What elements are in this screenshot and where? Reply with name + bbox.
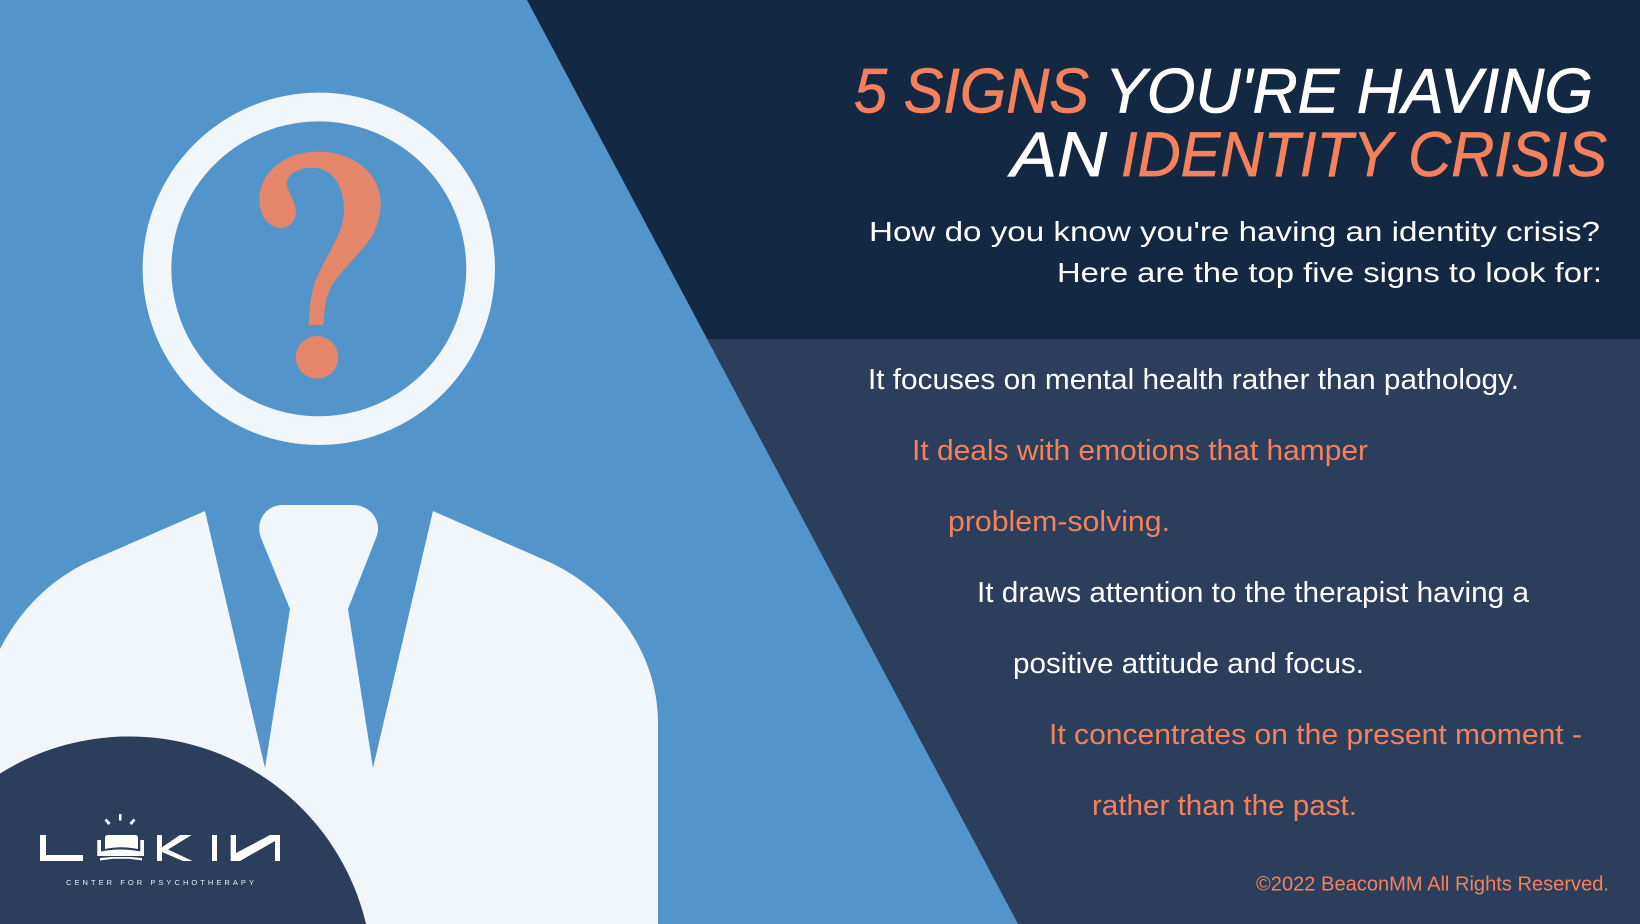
logo letter N mirrored — [231, 835, 280, 861]
icon: question mark — [259, 152, 381, 379]
icon: faceless person figure — [0, 107, 658, 924]
sign 3 — [977, 577, 1530, 680]
intro text — [869, 216, 1602, 288]
sign 4: rather than the past. — [1092, 790, 1357, 822]
suit and tie body — [0, 505, 658, 924]
panel: logo corner circle — [0, 736, 366, 924]
logo: Lokin Center for Psychotherapy — [40, 814, 280, 887]
logo letter L — [40, 835, 83, 861]
sign 4: It concentrates on the present moment - — [1049, 719, 1582, 751]
sign 3: It draws attention to the therapist having a — [977, 577, 1530, 609]
copyright notice: ©2022 BeaconMM All Rights Reserved. — [1256, 873, 1609, 896]
title line 1 — [854, 57, 1593, 127]
sign 3: positive attitude and focus. — [1013, 648, 1364, 680]
logo letter K — [157, 835, 192, 861]
sign 4 — [1049, 719, 1582, 822]
head ring — [157, 107, 481, 431]
panel: lighter navy list background — [0, 339, 1640, 924]
intro text: How do you know you're having an identity crisis? — [869, 216, 1600, 247]
sign 2: problem-solving. — [948, 506, 1170, 538]
panel: blue diagonal figure background — [0, 0, 1018, 924]
sign 2 — [912, 435, 1368, 538]
title line 2: AN — [1007, 120, 1108, 190]
logo letter I — [212, 835, 217, 861]
list of signs — [868, 364, 1582, 822]
sign 1: It focuses on mental health rather than pathology. — [868, 364, 1519, 396]
title line 1: YOU'RE HAVING — [1105, 57, 1593, 127]
logo couch icon — [97, 814, 144, 860]
panel: dark navy top header background — [0, 0, 1640, 339]
title — [854, 57, 1607, 190]
title line 2: IDENTITY CRISIS — [1121, 120, 1607, 190]
intro text: Here are the top five signs to look for: — [1057, 257, 1602, 288]
sign 2: It deals with emotions that hamper — [912, 435, 1368, 467]
title line 1: 5 SIGNS — [854, 57, 1089, 127]
logo tagline: CENTER FOR PSYCHOTHERAPY — [66, 878, 254, 887]
